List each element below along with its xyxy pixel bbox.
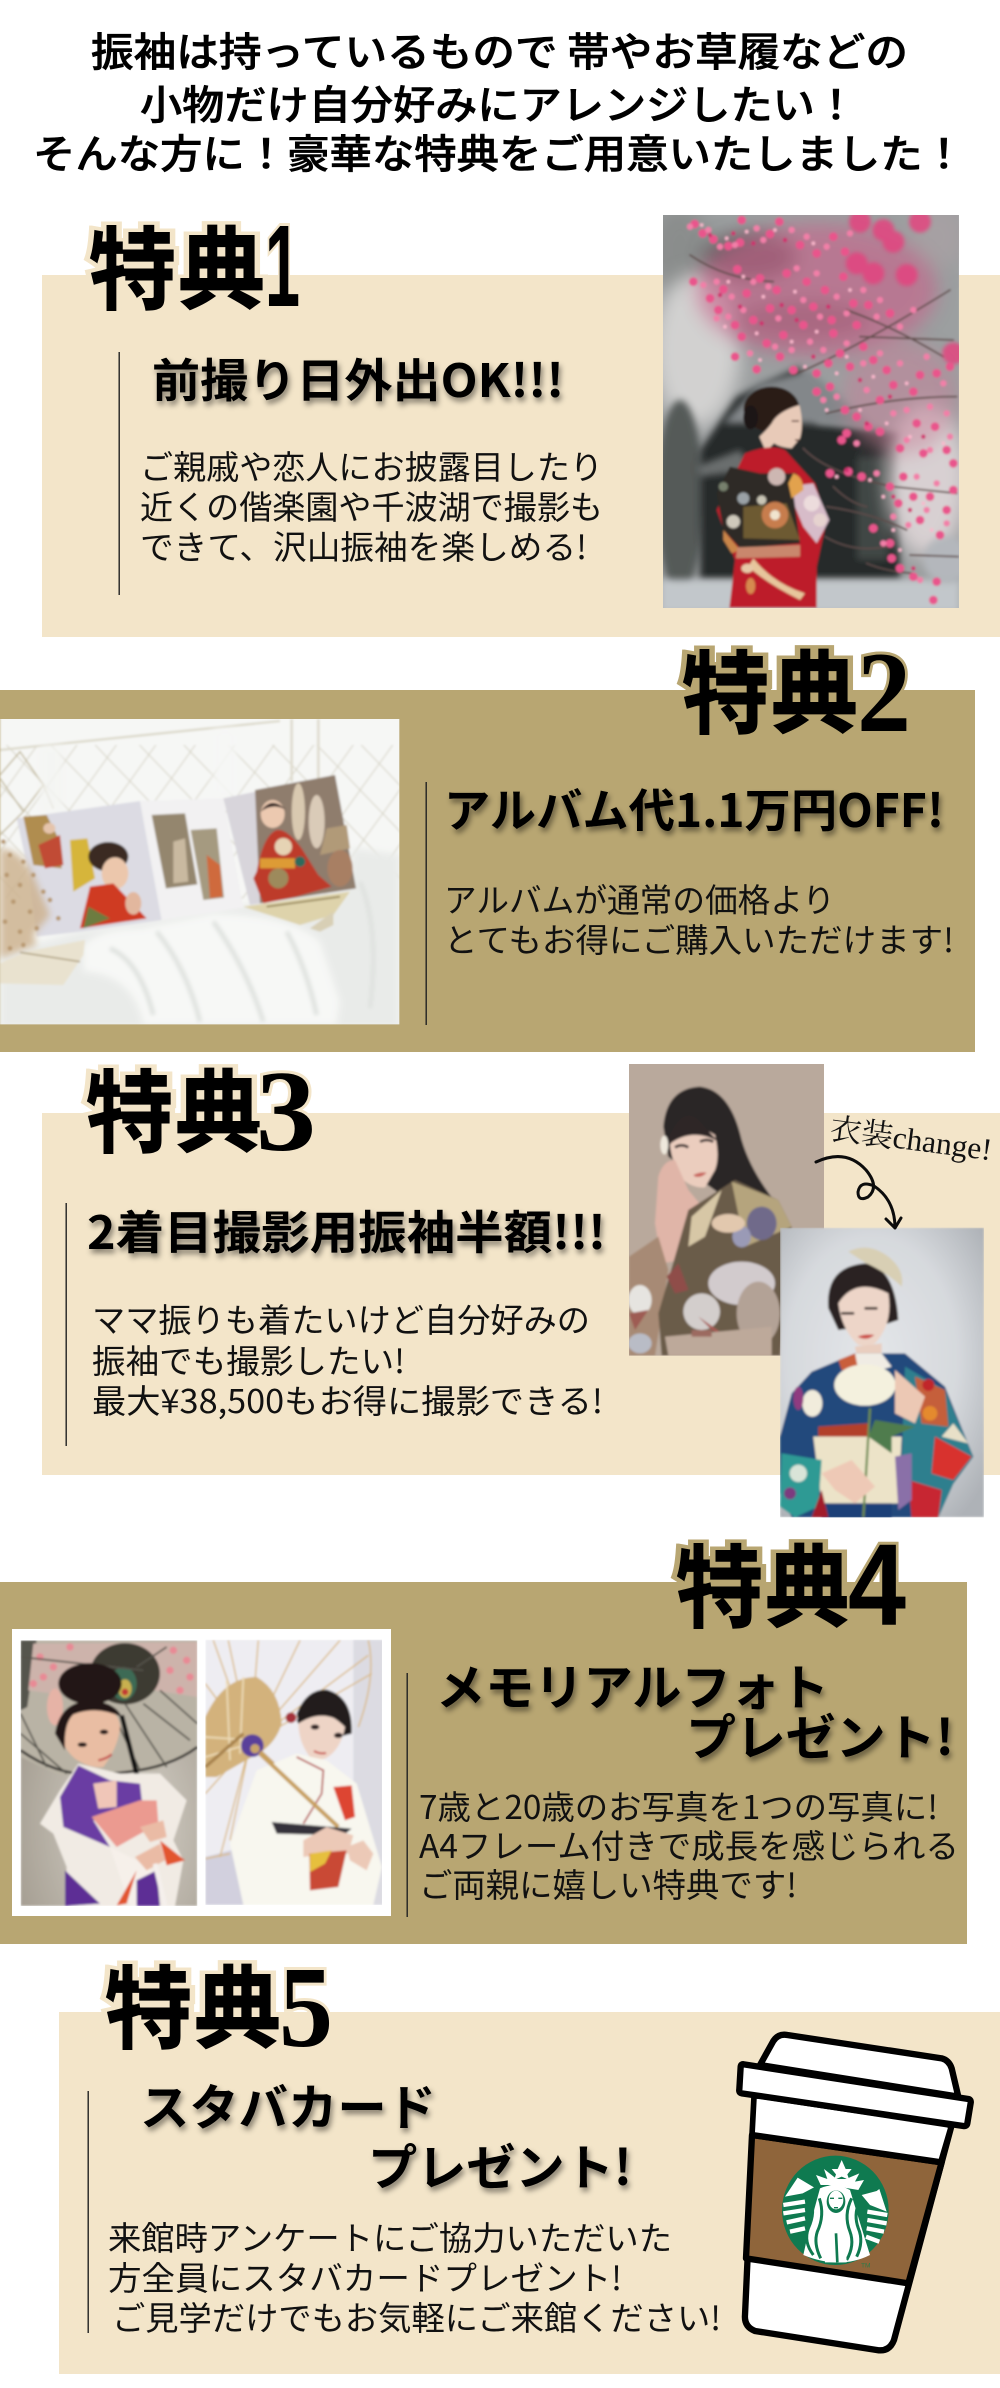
cup body [745, 2095, 952, 2350]
vertical rule 5 [88, 2091, 89, 2333]
photo: woman in brown furisode [625, 1060, 828, 1360]
heading 2: アルバム代1.1万円OFF! [444, 775, 944, 841]
body text 5: 来館時アンケートにご協力いただいた [108, 2212, 672, 2260]
body text 4: ご両親に嬉しい特典です! [419, 1859, 797, 1907]
label: 特典2: 2 [857, 629, 911, 757]
photo: girl with parasol [21, 1640, 197, 1906]
arrow: curl to second photo [816, 1157, 901, 1228]
heading 4: プレゼント! [686, 1699, 954, 1770]
panel 2 background [0, 690, 975, 1052]
label: 特典1: 特典 [88, 198, 266, 328]
label: 特典5: 5 [279, 1944, 333, 2072]
panel 5 background [59, 2012, 1000, 2374]
body text 1 [140, 441, 603, 569]
label: 特典5: 特典 [104, 1937, 282, 2067]
panel: 特典4 [0, 1516, 967, 1944]
photo: woman under plum blossoms [663, 215, 959, 608]
logo: green siren emblem [782, 2156, 889, 2265]
body text 1: できて、沢山振袖を楽しめる! [140, 521, 587, 569]
panel: 特典1 [42, 198, 1000, 637]
heading 1: 前撮り日外出OK!!! [152, 345, 564, 411]
label: 特典4: 特典 [675, 1516, 853, 1646]
body text 1: 近くの偕楽園や千波湖で撮影も [140, 481, 603, 529]
panel 1 background [42, 275, 1000, 637]
label: 特典1: 1 [265, 201, 300, 331]
body text 2: アルバムが通常の価格より [444, 874, 835, 922]
body text 5: ご見学だけでもお気軽にご来館ください! [112, 2292, 721, 2340]
body text 2 [444, 874, 954, 962]
caption: 衣装change!: 衣装change! [828, 1111, 994, 1167]
body text 1: ご親戚や恋人にお披露目したり [140, 441, 603, 489]
intro heading [33, 20, 965, 180]
heading 5: スタバカード [140, 2069, 436, 2140]
label: 特典3: 特典 [85, 1041, 263, 1171]
panel: 特典5 [59, 1937, 1000, 2374]
heading 5: プレゼント! [368, 2129, 632, 2200]
body text 3: 振袖でも撮影したい! [92, 1335, 405, 1383]
heading 4 [436, 1649, 954, 1770]
intro heading: 振袖は持っているもので 帯やお草履などの [91, 20, 908, 78]
photo: woman in white with parasol [205, 1640, 383, 1905]
body text 4: 7歳と20歳のお写真を1つの写真に! [419, 1781, 938, 1829]
panel: 特典3 [42, 1041, 1000, 1518]
label: 特典3: 3 [256, 1048, 316, 1176]
heading 4: メモリアルフォト [436, 1649, 829, 1720]
label: 特典4: 4 [848, 1520, 906, 1650]
body text 3 [92, 1294, 603, 1423]
heading 5 [140, 2069, 632, 2200]
panel 4 background [0, 1582, 967, 1944]
panel 3 background [42, 1113, 1000, 1475]
body text 5: 方全員にスタバカードプレゼント! [108, 2252, 622, 2300]
cup lid band [739, 2064, 971, 2126]
photo: album on white lace [0, 715, 403, 1028]
vertical rule 1 [118, 352, 120, 595]
photo: woman in navy furisode with white flower [780, 1228, 984, 1518]
trademark mark: TM [861, 2262, 871, 2269]
body text 2: とてもお得にご購入いただけます! [444, 914, 954, 962]
vertical rule 3 [66, 1203, 67, 1446]
body text 4 [419, 1781, 959, 1907]
intro heading: 小物だけ自分好みにアレンジしたい！ [140, 73, 857, 131]
photo frame [12, 1629, 391, 1916]
body text 4: A4フレーム付きで成長を感じられる [419, 1820, 959, 1868]
icon: takeaway coffee cup [739, 2035, 971, 2350]
cup sleeve [746, 2135, 942, 2283]
panel: 特典2 [0, 622, 975, 1052]
body text 3: 最大¥38,500もお得に撮影できる! [92, 1375, 603, 1423]
heading 3: 2着目撮影用振袖半額!!! [87, 1197, 606, 1263]
cup lid top [760, 2035, 958, 2097]
intro heading: そんな方に！豪華な特典をご用意いたしました！ [33, 122, 965, 180]
vertical rule 2 [426, 782, 427, 1025]
body text 5 [108, 2212, 721, 2340]
body text 3: ママ振りも着たいけど自分好みの [92, 1294, 590, 1342]
vertical rule 4 [406, 1673, 408, 1917]
label: 特典2: 特典 [681, 622, 859, 752]
